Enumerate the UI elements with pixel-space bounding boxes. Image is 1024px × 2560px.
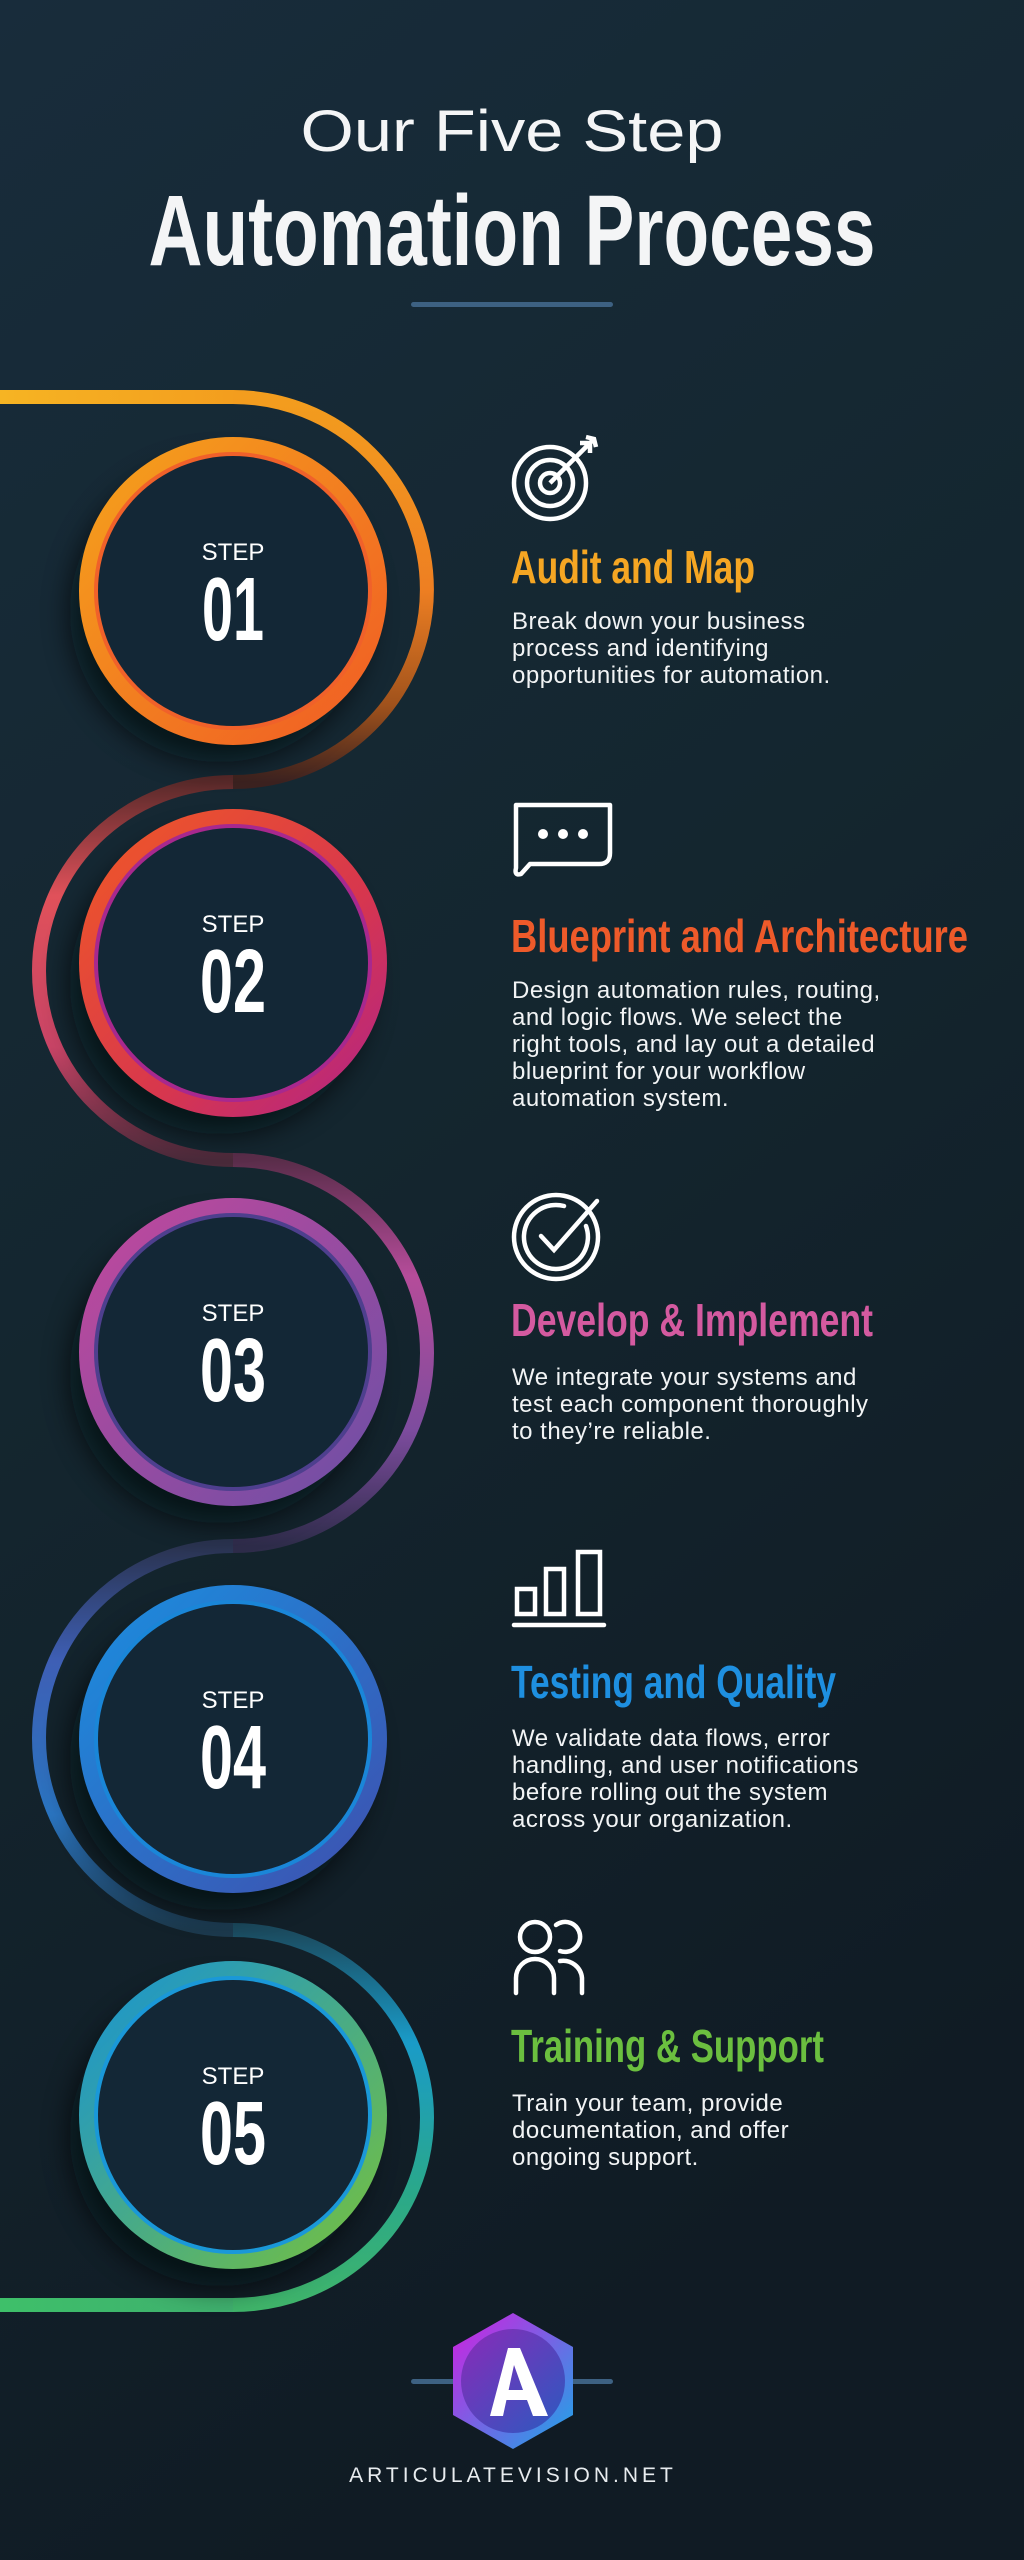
step 4 text — [511, 1552, 859, 1833]
step circle 1: 01 — [202, 560, 264, 660]
step 5 text — [511, 1922, 824, 2171]
step circle 1 — [70, 437, 387, 762]
step circle 3: 03 — [200, 1321, 266, 1421]
step circle 4: STEP — [202, 1687, 264, 1714]
step 2 text — [511, 805, 968, 1112]
step 4 text: Testing and Quality — [511, 1656, 836, 1708]
connector path — [0, 397, 427, 2305]
icon: chat bubble — [516, 805, 610, 874]
step 2 text: Design automation rules, routing, — [512, 977, 881, 1004]
step circle 3 — [70, 1198, 387, 1523]
logo — [411, 2313, 613, 2449]
step 4 text: handling, and user notifications — [512, 1752, 859, 1779]
step circle 5 — [70, 1961, 387, 2286]
step 3 text — [511, 1195, 873, 1445]
step 2 text: and logic flows. We select the — [512, 1004, 843, 1031]
step circle 2: STEP — [202, 911, 264, 938]
title: Our Five Step — [300, 99, 724, 164]
step 2 text: right tools, and lay out a detailed — [512, 1031, 875, 1058]
step 2 text: blueprint for your workflow — [512, 1058, 806, 1085]
icon: target — [514, 437, 596, 519]
step circle 1: STEP — [202, 539, 264, 566]
step 3 text: to they’re reliable. — [512, 1418, 711, 1445]
step 5 text: documentation, and offer — [512, 2117, 789, 2144]
step 4 text: across your organization. — [512, 1806, 793, 1833]
step circle 5: STEP — [202, 2063, 264, 2090]
step 2 text: automation system. — [512, 1085, 729, 1112]
step 5 text: Train your team, provide — [512, 2090, 783, 2117]
icon: check circle — [514, 1195, 598, 1279]
icon: people — [516, 1922, 582, 1993]
step circle 2 — [70, 809, 387, 1134]
step 1 text: Audit and Map — [511, 541, 755, 593]
step 3 text: We integrate your systems and — [512, 1364, 857, 1391]
website: ARTICULATEVISION.NET — [349, 2464, 677, 2487]
step 1 text — [511, 437, 831, 689]
step 1 text: Break down your business — [512, 608, 805, 635]
step circle 5: 05 — [200, 2084, 266, 2184]
icon: bar chart — [514, 1552, 604, 1625]
step 4 text: We validate data flows, error — [512, 1725, 830, 1752]
step 1 text: opportunities for automation. — [512, 662, 831, 689]
step 5 text: ongoing support. — [512, 2144, 699, 2171]
step circle 4 — [70, 1585, 387, 1910]
step circle 4: 04 — [200, 1708, 266, 1808]
step 4 text: before rolling out the system — [512, 1779, 828, 1806]
step 5 text: Training & Support — [511, 2020, 824, 2072]
step 3 text: test each component thoroughly — [512, 1391, 869, 1418]
step 1 text: process and identifying — [512, 635, 769, 662]
title — [148, 99, 876, 287]
step circle 3: STEP — [202, 1300, 264, 1327]
step 3 text: Develop & Implement — [511, 1294, 873, 1346]
step circle 2: 02 — [200, 932, 266, 1032]
